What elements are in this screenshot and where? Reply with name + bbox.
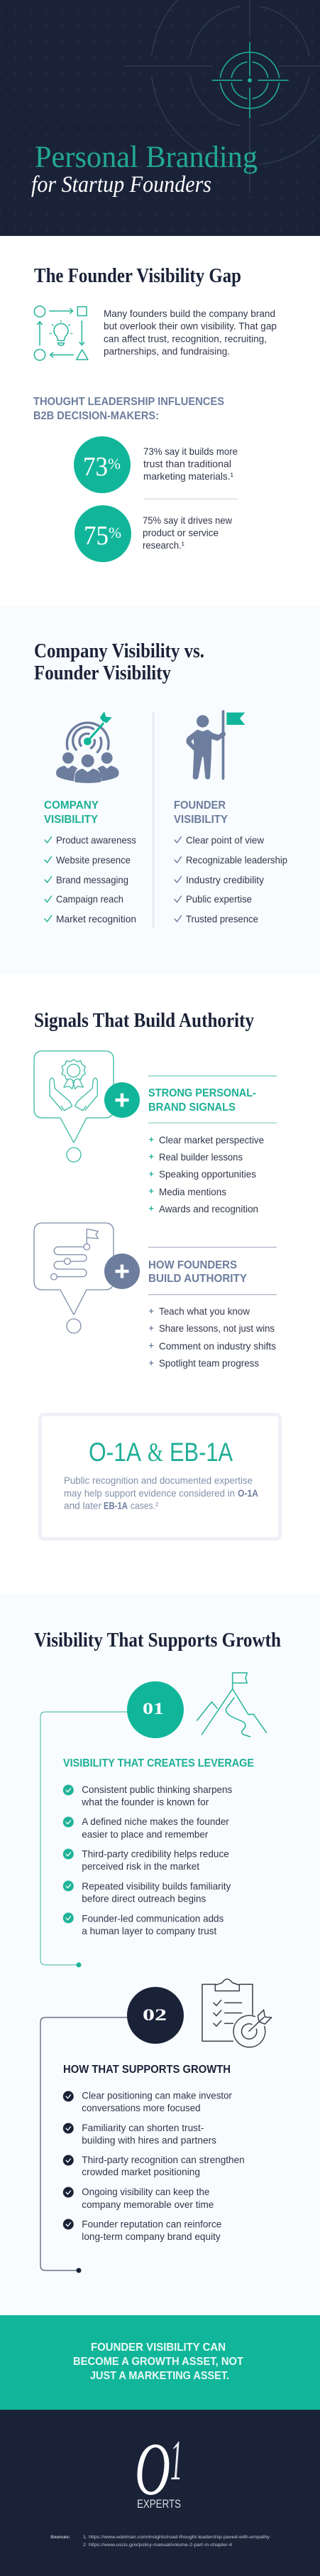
list: how that supports growth: Third-party recognition can strengthen xyxy=(82,2154,245,2165)
panel: the founder visibility gap xyxy=(0,236,320,605)
panel: signals that build authority xyxy=(0,974,320,1594)
callout: O-1A and EB-1A: and later xyxy=(64,1499,101,1511)
column: founder visibility: Recognizable leadership xyxy=(186,854,287,866)
list: how that supports growth: Founder reputation can reinforce xyxy=(82,2218,222,2229)
stat: 73 percent: 73 xyxy=(83,452,108,482)
callout: O-1A and EB-1A: & xyxy=(148,1438,163,1467)
column: company visibility: Product awareness xyxy=(56,834,136,846)
icon: target with team xyxy=(56,711,119,783)
text block: intro: can affect trust, recognition, recruiting, xyxy=(104,333,267,344)
list: how that supports growth: Familiarity can shorten trust- xyxy=(82,2122,204,2133)
section: how founders build authority: Spotlight team progress xyxy=(159,1357,259,1369)
icon: mountain with flag xyxy=(197,1673,267,1737)
text block: intro: Many founders build the company brand xyxy=(104,308,275,319)
list: visibility that creates leverage: VISIBILITY THAT CREATES LEVERAGE xyxy=(63,1757,254,1769)
subheading: thought leadership: THOUGHT LEADERSHIP INFLUENCES xyxy=(33,396,224,408)
stat: 75 percent: % xyxy=(109,524,121,541)
title: Personal Branding xyxy=(35,141,258,174)
callout: O-1A and EB-1A xyxy=(40,1414,280,1539)
stat: 75 percent: product or service xyxy=(143,527,219,539)
section: how founders build authority: BUILD AUTHORITY xyxy=(148,1273,248,1285)
stat: 75 percent: research.¹ xyxy=(143,539,184,551)
list: visibility that creates leverage: before direct outreach begins xyxy=(82,1893,206,1904)
heading: Company Visibility vs. xyxy=(34,640,204,662)
stat: 75 percent xyxy=(75,505,233,562)
panel: company vs founder visibility xyxy=(0,605,320,974)
section: strong personal-brand signals: Media mentions xyxy=(159,1186,226,1197)
text block: intro: but overlook their own visibility. That gap xyxy=(104,320,277,332)
logo: O1 Experts: EXPERTS xyxy=(137,2497,181,2511)
sources: 2. xyxy=(83,2543,87,2548)
panel: closing statement banner: BECOME A GROWTH ASSET, NOT xyxy=(73,2356,244,2368)
list: how that supports growth: company memorable over time xyxy=(82,2199,214,2210)
section: how founders build authority: Share lessons, not just wins xyxy=(159,1322,275,1334)
column: company visibility: Market recognition xyxy=(56,913,136,925)
heading: Founder Visibility xyxy=(34,662,171,684)
icon: teal target xyxy=(212,43,288,118)
list: visibility that creates leverage: Repeated visibility builds familiarity xyxy=(82,1880,231,1892)
badge: 02: 02 xyxy=(143,2006,167,2024)
connector: leverage bracket xyxy=(40,1712,128,1967)
stat: 73 percent: marketing materials.¹ xyxy=(143,470,233,482)
column: founder visibility: Clear point of view xyxy=(186,834,265,846)
icon: process cycle with light bulb xyxy=(34,306,88,360)
list: visibility that creates leverage: a human layer to company trust xyxy=(82,1925,216,1936)
sources xyxy=(50,2535,270,2548)
stat: 75 percent: 75% say it drives new xyxy=(143,514,233,526)
sources: https://www.uscis.gov/policy-manual/volume-2-part-m-chapter-4 xyxy=(89,2543,232,2548)
section: how founders build authority xyxy=(148,1246,277,1369)
heading xyxy=(34,640,204,684)
icon: speech bubble with route and flag xyxy=(34,1223,140,1333)
section: how founders build authority: Comment on industry shifts xyxy=(159,1340,276,1352)
stat: 75 percent: 75 xyxy=(84,521,109,551)
list: how that supports growth: conversations more focused xyxy=(82,2102,201,2113)
column: company visibility: VISIBILITY xyxy=(44,814,99,826)
section: strong personal-brand signals: Real builder lessons xyxy=(159,1151,243,1163)
icon: clipboard with target xyxy=(202,1979,272,2047)
panel: footer: 1 xyxy=(170,2430,182,2492)
list: visibility that creates leverage: perceived risk in the market xyxy=(82,1860,199,1872)
text block: intro xyxy=(104,308,277,357)
panel: closing statement banner: JUST A MARKETING ASSET. xyxy=(90,2370,229,2382)
list: visibility that creates leverage: Founder-led communication adds xyxy=(82,1913,224,1924)
heading: The Founder Visibility Gap xyxy=(34,264,241,287)
list: how that supports growth xyxy=(63,2064,245,2242)
list: visibility that creates leverage: A defined niche makes the founder xyxy=(82,1816,229,1827)
section: strong personal-brand signals xyxy=(148,1075,277,1214)
panel: visibility that supports growth xyxy=(0,1594,320,2315)
callout: O-1A and EB-1A: Public recognition and documented expertise xyxy=(64,1475,253,1486)
heading: Visibility That Supports Growth xyxy=(34,1629,281,1651)
list: how that supports growth: HOW THAT SUPPORTS GROWTH xyxy=(63,2064,231,2076)
badge: 01: 01 xyxy=(143,1700,164,1718)
icon: large background target xyxy=(123,0,320,193)
section: strong personal-brand signals: BRAND SIGNALS xyxy=(148,1101,236,1114)
list: visibility that creates leverage xyxy=(63,1757,254,1936)
heading: Signals That Build Authority xyxy=(34,1009,254,1032)
subheading: thought leadership: B2B DECISION-MAKERS: xyxy=(33,410,159,422)
list: visibility that creates leverage: what the founder is known for xyxy=(81,1796,209,1808)
column: founder visibility: VISIBILITY xyxy=(174,814,228,826)
list: how that supports growth: Ongoing visibility can keep the xyxy=(82,2186,210,2197)
list: visibility that creates leverage: Consistent public thinking sharpens xyxy=(82,1784,232,1795)
column: founder visibility: FOUNDER xyxy=(174,799,226,812)
sources: Sources: xyxy=(50,2535,70,2540)
title: for Startup Founders xyxy=(31,172,211,198)
badge: 02 xyxy=(127,1987,184,2044)
icon: speech bubble with award xyxy=(34,1051,140,1162)
panel: closing statement banner xyxy=(0,2315,320,2410)
panel: footer xyxy=(0,2410,320,2576)
column: founder visibility: Industry credibility xyxy=(186,874,264,885)
column: founder visibility: Public expertise xyxy=(186,893,252,905)
sources: 1. xyxy=(83,2535,87,2540)
section: strong personal-brand signals: Awards and recognition xyxy=(159,1203,258,1214)
callout: O-1A and EB-1A: EB-1A xyxy=(170,1438,233,1467)
callout: O-1A and EB-1A: EB-1A xyxy=(104,1499,128,1511)
stat: 73 percent xyxy=(74,436,238,493)
column: company visibility: Campaign reach xyxy=(56,893,123,905)
panel: closing statement banner: FOUNDER VISIBILITY CAN xyxy=(91,2341,226,2354)
column: company visibility xyxy=(44,799,136,925)
section: how founders build authority: HOW FOUNDERS xyxy=(148,1259,237,1271)
callout: O-1A and EB-1A: O-1A xyxy=(89,1438,141,1467)
column: company visibility: Brand messaging xyxy=(56,874,128,885)
list: how that supports growth: building with hires and partners xyxy=(82,2135,216,2146)
sources: https://www.edelman.com/insights/road-thought-leadership-paved-with-empathy xyxy=(89,2535,270,2540)
panel: hero header xyxy=(0,0,320,236)
callout: O-1A and EB-1A: may help support evidence considered in xyxy=(64,1487,235,1499)
subheading: thought leadership xyxy=(33,396,224,422)
badge: 01 xyxy=(127,1681,184,1738)
column: founder visibility: Trusted presence xyxy=(186,913,258,925)
column: company visibility: COMPANY xyxy=(44,799,99,812)
list: how that supports growth: long-term company brand equity xyxy=(82,2231,221,2242)
callout: O-1A and EB-1A: cases.² xyxy=(131,1499,158,1511)
column: company visibility: Website presence xyxy=(56,854,131,866)
list: how that supports growth: crowded market positioning xyxy=(82,2166,200,2177)
list: visibility that creates leverage: easier to place and remember xyxy=(82,1828,209,1840)
section: strong personal-brand signals: STRONG PERSONAL- xyxy=(148,1087,256,1099)
section: strong personal-brand signals: Clear market perspective xyxy=(159,1134,264,1146)
logo: O1 Experts: O xyxy=(135,2427,170,2511)
callout: O-1A and EB-1A: O-1A xyxy=(238,1487,258,1499)
section: how founders build authority: Teach what you know xyxy=(159,1305,250,1317)
list: how that supports growth: Clear positioning can make investor xyxy=(82,2090,232,2101)
stat: 73 percent: trust than traditional xyxy=(143,458,231,469)
stat: 73 percent: % xyxy=(108,455,121,473)
stat: 73 percent: 73% say it builds more xyxy=(143,446,238,457)
icon: founder with flag xyxy=(186,710,245,780)
text block: intro: partnerships, and fundraising. xyxy=(104,345,230,357)
title xyxy=(31,141,258,198)
column: founder visibility xyxy=(174,799,287,925)
list: visibility that creates leverage: Third-party credibility helps reduce xyxy=(82,1848,229,1859)
section: strong personal-brand signals: Speaking opportunities xyxy=(159,1168,256,1180)
connector: growth bracket xyxy=(40,2017,128,2273)
